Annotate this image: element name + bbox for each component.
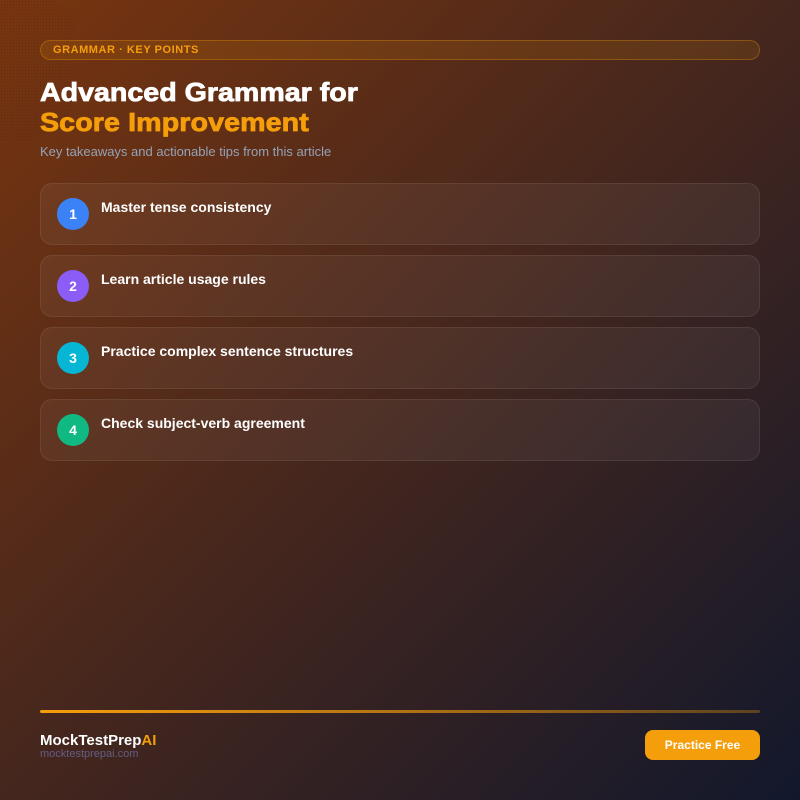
number badge 4: 4 [69, 422, 77, 438]
brand url: mocktestprepai.com [40, 748, 138, 760]
point 4 text: Check subject-verb agreement [101, 415, 305, 431]
number badge 2: 2 [69, 278, 77, 294]
decorative dotted glow: top-left [0, 0, 75, 140]
panel: point 1 [40, 183, 760, 245]
panel: point 4 [40, 399, 760, 461]
number badge 2 [57, 270, 89, 302]
brand name: MockTestPrepAI [40, 732, 156, 749]
brand block [40, 732, 156, 760]
number badge 1: 1 [69, 206, 77, 222]
subtitle: Key takeaways and actionable tips from this article [40, 144, 331, 159]
number badge 1 [57, 198, 89, 230]
number badge 4 [57, 414, 89, 446]
point 3 text: Practice complex sentence structures [101, 343, 353, 359]
point 1 text: Master tense consistency [101, 199, 271, 215]
title: Score Improvement [40, 107, 309, 137]
tag pill: GRAMMAR · KEY POINTS [53, 44, 199, 56]
number badge 3: 3 [69, 350, 77, 366]
panel: point 2 [40, 255, 760, 317]
tag pill [40, 40, 760, 60]
point 2 text: Learn article usage rules [101, 271, 266, 287]
title: Advanced Grammar for [40, 77, 358, 107]
call-to-action button [645, 730, 760, 760]
number badge 3 [57, 342, 89, 374]
title [40, 77, 358, 137]
call-to-action button: Practice Free [665, 738, 740, 752]
panel: point 3 [40, 327, 760, 389]
accent divider bar [40, 710, 760, 713]
